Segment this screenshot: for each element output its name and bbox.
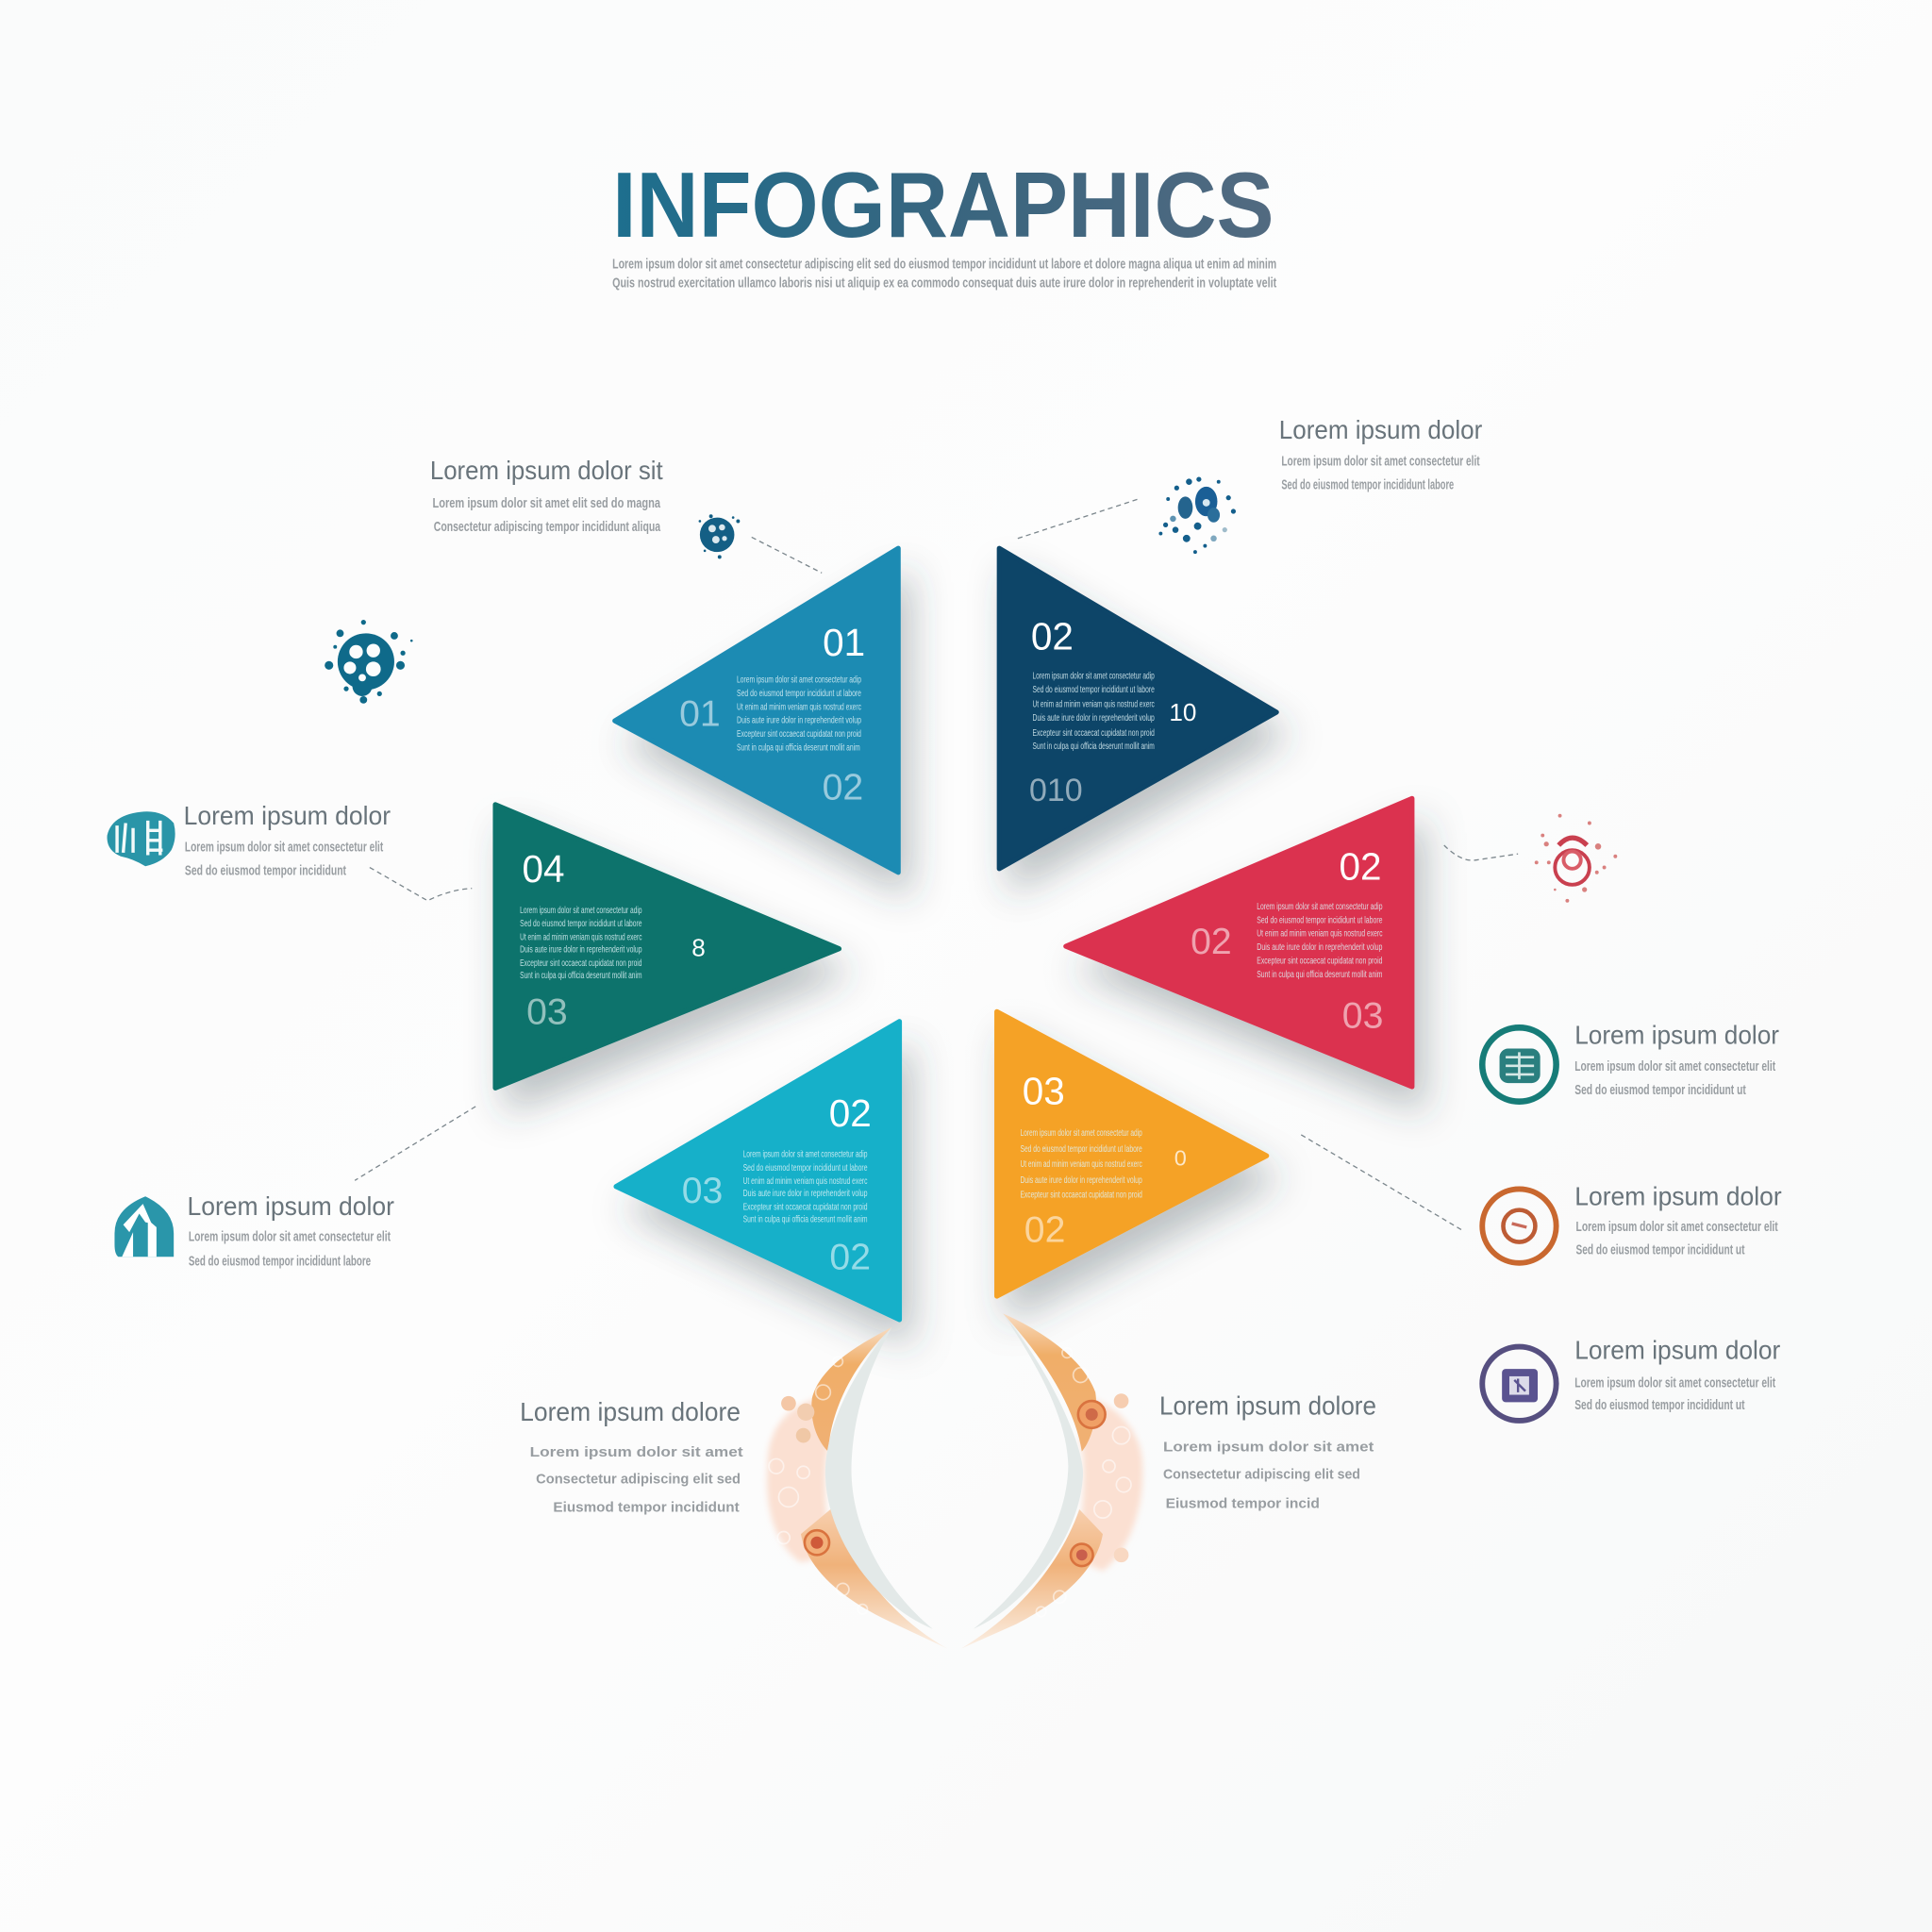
text block: right callout one: Lorem ipsum dolor sit amet consectetur elit — [1574, 1059, 1775, 1074]
text block: lower right callout: Consectetur adipiscing elit sed — [1163, 1467, 1360, 1482]
panel: triangle 04 green — [495, 805, 839, 1088]
text block: right callout two: Sed do eiusmod tempor incididunt ut — [1576, 1243, 1745, 1258]
panel: triangle 04 green: Duis aute irure dolor in reprehenderit volup — [520, 945, 642, 956]
text block: left callout lower — [188, 1191, 394, 1269]
text block: left callout upper: Lorem ipsum dolor sit amet consectetur elit — [185, 841, 383, 856]
panel: triangle red — [1066, 798, 1412, 1087]
panel: triangle 01 blue: Duis aute irure dolor in reprehenderit volup — [737, 716, 861, 726]
text block: lower left callout: Eiusmod tempor incididunt — [553, 1501, 740, 1516]
icon: teal arrow house — [114, 1196, 174, 1257]
panel: triangle red: Sed do eiusmod tempor incididunt ut labore — [1257, 915, 1383, 925]
connector: left callout to triangle 04 — [370, 868, 472, 901]
icon: purple ring — [1482, 1347, 1557, 1421]
text block: left callout upper — [184, 801, 391, 878]
text block: left callout upper: Lorem ipsum dolor — [184, 801, 391, 830]
title: INFOGRAPHICS — [612, 153, 1274, 257]
panel: triangle 02 navy: Duis aute irure dolor in reprehenderit volup — [1033, 713, 1155, 724]
text block: lower right callout: Eiusmod tempor incid — [1166, 1497, 1320, 1512]
text block: right callout one: Lorem ipsum dolor — [1574, 1020, 1779, 1049]
panel: triangle cyan: Sunt in culpa qui officia deserunt mollit anim — [743, 1215, 868, 1225]
panel: triangle 01 blue: Sed do eiusmod tempor incididunt ut labore — [737, 689, 861, 699]
text block: right callout three: Lorem ipsum dolor sit amet consectetur elit — [1574, 1376, 1775, 1391]
panel: triangle 03 orange: Excepteur sint occaecat cupidatat non proid — [1020, 1191, 1142, 1201]
text block: lower left callout: Consectetur adipiscing elit sed — [536, 1473, 741, 1488]
panel: triangle 02 navy — [999, 548, 1276, 869]
text block: top right callout: Sed do eiusmod tempor incididunt labore — [1281, 478, 1454, 493]
panel: triangle 02 navy: Sed do eiusmod tempor incididunt ut labore — [1033, 685, 1155, 695]
panel: triangle cyan: Excepteur sint occaecat cupidatat non proid — [743, 1203, 868, 1213]
text block: lower left callout — [520, 1397, 743, 1516]
text block: right callout one — [1574, 1020, 1779, 1098]
panel: triangle cyan: Sed do eiusmod tempor incididunt ut labore — [743, 1163, 868, 1174]
panel: triangle red: Ut enim ad minim veniam quis nostrud exerc — [1257, 929, 1382, 940]
panel: triangle 03 orange: Duis aute irure dolor in reprehenderit volup — [1020, 1175, 1142, 1186]
panel: triangle 04 green: 04 — [522, 847, 565, 891]
panel: triangle 03 orange: 03 — [1023, 1069, 1065, 1112]
text block: lower right callout: Lorem ipsum dolore — [1159, 1391, 1376, 1420]
subtitle text: Quis nostrud exercitation ullamco laboris nisi ut aliquip ex ea commodo consequat duis aute irure dolor in reprehenderit in voluptate velit — [612, 275, 1276, 291]
icon: small navy splatter — [699, 514, 740, 558]
panel: triangle 01 blue: 01 — [823, 621, 865, 664]
text block: right callout three: Lorem ipsum dolor — [1574, 1336, 1780, 1365]
text block: top left callout: Lorem ipsum dolor sit — [430, 456, 663, 485]
panel: triangle 04 green: 03 — [526, 991, 568, 1032]
icon: teal blob with glyphs — [108, 811, 175, 866]
panel: triangle 02 navy: Lorem ipsum dolor sit amet consectetur adip — [1033, 672, 1155, 682]
text block: top left callout: Lorem ipsum dolor sit amet elit sed do magna — [432, 496, 661, 511]
panel: triangle cyan: 03 — [682, 1171, 723, 1211]
subtitle text — [612, 258, 1276, 291]
panel: triangle cyan — [616, 1022, 899, 1320]
panel: triangle 03 orange: Ut enim ad minim veniam quis nostrud exerc — [1020, 1159, 1142, 1170]
panel: triangle cyan: 02 — [829, 1237, 871, 1277]
panel: triangle 04 green: Lorem ipsum dolor sit amet consectetur adip — [520, 906, 642, 916]
panel: triangle cyan: Duis aute irure dolor in reprehenderit volup — [743, 1189, 868, 1199]
connector: orange triangle to ring icon — [1301, 1135, 1461, 1230]
text block: left callout lower: Lorem ipsum dolor — [188, 1191, 394, 1221]
panel: triangle red: Sunt in culpa qui officia deserunt mollit anim — [1257, 970, 1382, 980]
panel: triangle 01 blue: Lorem ipsum dolor sit amet consectetur adip — [737, 675, 861, 686]
panel: triangle 02 navy: 02 — [1031, 614, 1074, 658]
connector: lower left callout to green triangle — [355, 1107, 475, 1180]
panel: triangle 03 orange: 0 — [1174, 1146, 1187, 1171]
icon: teal splatter — [325, 620, 413, 704]
panel: triangle 01 blue: Ut enim ad minim veniam quis nostrud exerc — [737, 702, 861, 712]
text block: lower right callout — [1159, 1391, 1376, 1512]
panel: triangle cyan: Ut enim ad minim veniam quis nostrud exerc — [743, 1176, 868, 1187]
panel: triangle 02 navy: Excepteur sint occaecat cupidatat non proid — [1033, 728, 1155, 739]
text block: top right callout — [1279, 415, 1482, 493]
text block: top left callout: Consectetur adipiscing tempor incididunt aliqua — [434, 520, 661, 535]
panel: triangle 03 orange: Lorem ipsum dolor sit amet consectetur adip — [1020, 1128, 1142, 1139]
text block: left callout lower: Sed do eiusmod tempor incididunt labore — [189, 1254, 371, 1269]
panel: triangle 04 green: Excepteur sint occaecat cupidatat non proid — [520, 958, 642, 969]
text block: right callout one: Sed do eiusmod tempor incididunt ut — [1574, 1083, 1746, 1098]
icon: teal ring — [1482, 1027, 1557, 1102]
text block: right callout two — [1574, 1181, 1782, 1258]
panel: triangle 01 blue: Sunt in culpa qui officia deserunt mollit anim — [737, 742, 860, 753]
panel: triangle 02 navy: 010 — [1029, 773, 1083, 808]
panel: triangle 04 green: 8 — [691, 934, 706, 962]
panel: triangle 04 green: Sed do eiusmod tempor incididunt ut labore — [520, 919, 642, 929]
connector: red icon to red triangle — [1444, 845, 1518, 860]
text block: lower left callout: Lorem ipsum dolor sit amet — [530, 1445, 743, 1460]
subtitle text: Lorem ipsum dolor sit amet consectetur adipiscing elit sed do eiusmod tempor incididunt ut labore et dolore magna aliqua ut enim ad minim — [612, 258, 1276, 273]
icon: red target splatter — [1535, 814, 1617, 903]
panel: triangle 04 green: Sunt in culpa qui officia deserunt mollit anim — [520, 971, 641, 981]
text block: right callout two: Lorem ipsum dolor — [1574, 1181, 1782, 1210]
text block: top left callout — [430, 456, 663, 535]
connector: top left icon to triangle 01 — [752, 537, 822, 573]
panel: triangle 02 navy: 10 — [1169, 698, 1196, 726]
ornament: right crescent — [961, 1313, 1142, 1649]
panel: triangle 02 navy: Sunt in culpa qui officia deserunt mollit anim — [1033, 741, 1155, 752]
text block: top right callout: Lorem ipsum dolor — [1279, 415, 1482, 444]
panel: triangle 03 orange: 02 — [1024, 1210, 1065, 1251]
panel: triangle cyan: Lorem ipsum dolor sit amet consectetur adip — [743, 1149, 868, 1159]
panel: triangle 03 orange — [997, 1011, 1267, 1296]
panel: triangle cyan: 02 — [829, 1091, 872, 1135]
icon: orange ring — [1482, 1189, 1557, 1263]
panel: triangle 01 blue: Excepteur sint occaecat cupidatat non proid — [737, 729, 861, 740]
text block: lower left callout: Lorem ipsum dolore — [520, 1397, 741, 1426]
ornament: left crescent — [767, 1327, 947, 1649]
panel: triangle red: 02 — [1339, 845, 1381, 889]
panel: triangle 01 blue: 02 — [823, 768, 863, 808]
panel: triangle red: Lorem ipsum dolor sit amet consectetur adip — [1257, 902, 1383, 912]
icon: blue scattered dots — [1158, 476, 1236, 554]
text block: lower right callout: Lorem ipsum dolor sit amet — [1163, 1441, 1374, 1456]
panel: triangle red: Duis aute irure dolor in reprehenderit volup — [1257, 942, 1383, 953]
panel: triangle red: 03 — [1342, 995, 1383, 1036]
panel: triangle 01 blue — [615, 548, 898, 873]
panel: triangle 01 blue: 01 — [679, 693, 721, 734]
panel: triangle red: 02 — [1191, 922, 1232, 962]
text block: right callout three: Sed do eiusmod tempor incididunt ut — [1574, 1398, 1745, 1413]
text block: right callout three — [1574, 1336, 1780, 1413]
panel: triangle 02 navy: Ut enim ad minim veniam quis nostrud exerc — [1033, 700, 1155, 710]
connector: top right icon to triangle 02 — [1018, 499, 1139, 539]
panel: triangle 04 green: Ut enim ad minim veniam quis nostrud exerc — [520, 933, 641, 943]
text block: left callout lower: Lorem ipsum dolor sit amet consectetur elit — [189, 1229, 391, 1244]
text block: top right callout: Lorem ipsum dolor sit amet consectetur elit — [1281, 455, 1480, 470]
panel: triangle red: Excepteur sint occaecat cupidatat non proid — [1257, 956, 1383, 966]
text block: right callout two: Lorem ipsum dolor sit amet consectetur elit — [1576, 1220, 1778, 1235]
panel: triangle 03 orange: Sed do eiusmod tempor incididunt ut labore — [1020, 1144, 1142, 1155]
text block: left callout upper: Sed do eiusmod tempor incididunt — [185, 863, 346, 878]
